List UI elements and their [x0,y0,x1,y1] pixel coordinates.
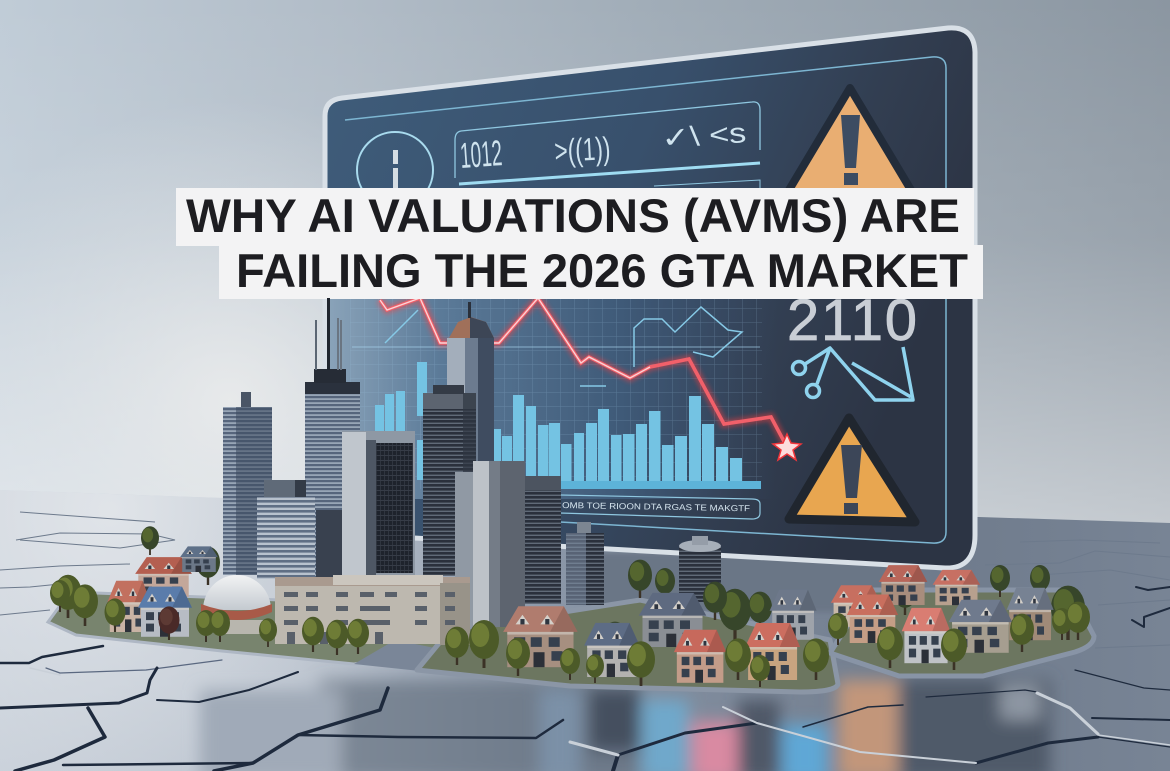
title text line 1: WHY AI VALUATIONS (AVMS) ARE [186,189,960,242]
bar chart [375,362,761,489]
floor reflections of the screen [200,680,1050,771]
title band line 2 [219,245,983,299]
round tower [679,536,721,602]
short striped tower [257,480,315,579]
left island base [48,592,470,664]
screen number 2110: 2110 [787,288,917,353]
trees behind houses [141,526,1085,660]
warning triangle bottom [789,418,915,522]
caption box [560,495,760,519]
dark tower beside screen [525,476,561,604]
red falling price line [380,298,787,447]
model city [48,298,1094,692]
header readout box: ✓\ <s [660,117,747,154]
dashboard screen [325,28,975,612]
cracked reflective floor [0,490,1170,771]
road [354,640,445,671]
header readout box: 1012 [459,132,503,176]
tall tower with antennas [305,298,360,580]
background wall [0,0,1170,530]
horizon-side hairline cracks [0,512,1170,648]
right island houses [831,565,1054,663]
star marker [773,434,801,460]
icon: cyan network arrow [792,347,913,400]
trees in front [50,575,1090,687]
dome building [201,575,272,634]
right island base [830,590,1094,676]
skyscrapers [223,298,721,627]
secondary cyan trend line [385,307,742,386]
header readout box: >((1)) [553,130,611,169]
dark red tree [158,606,180,640]
screen reflection under panel [590,552,890,612]
title banner [176,188,983,299]
raised white crack edges [30,668,1170,763]
tower far left [223,392,272,575]
black glass tower [342,431,415,577]
title text line 2: FAILING THE 2026 GTA MARKET [236,244,968,297]
title band line 1 [176,188,974,246]
screen frame [325,28,975,568]
left island houses [107,546,218,637]
chart background and grid [328,299,778,499]
light grey tower [455,461,525,627]
main floor cracks [0,587,1170,771]
central island houses [503,590,817,683]
inner screen outline [345,57,946,543]
tower with orange roof [447,302,494,463]
icon: info circle [357,132,433,208]
low-rise block [275,575,470,645]
dark striped tower [423,385,476,576]
caption box: OMB TOE RIOON DTA RGAS TE MAKGTF [562,500,750,513]
small tower left of houses [566,522,604,605]
header readout box [455,102,760,190]
warning triangle top [780,88,920,245]
central island base [417,600,838,692]
